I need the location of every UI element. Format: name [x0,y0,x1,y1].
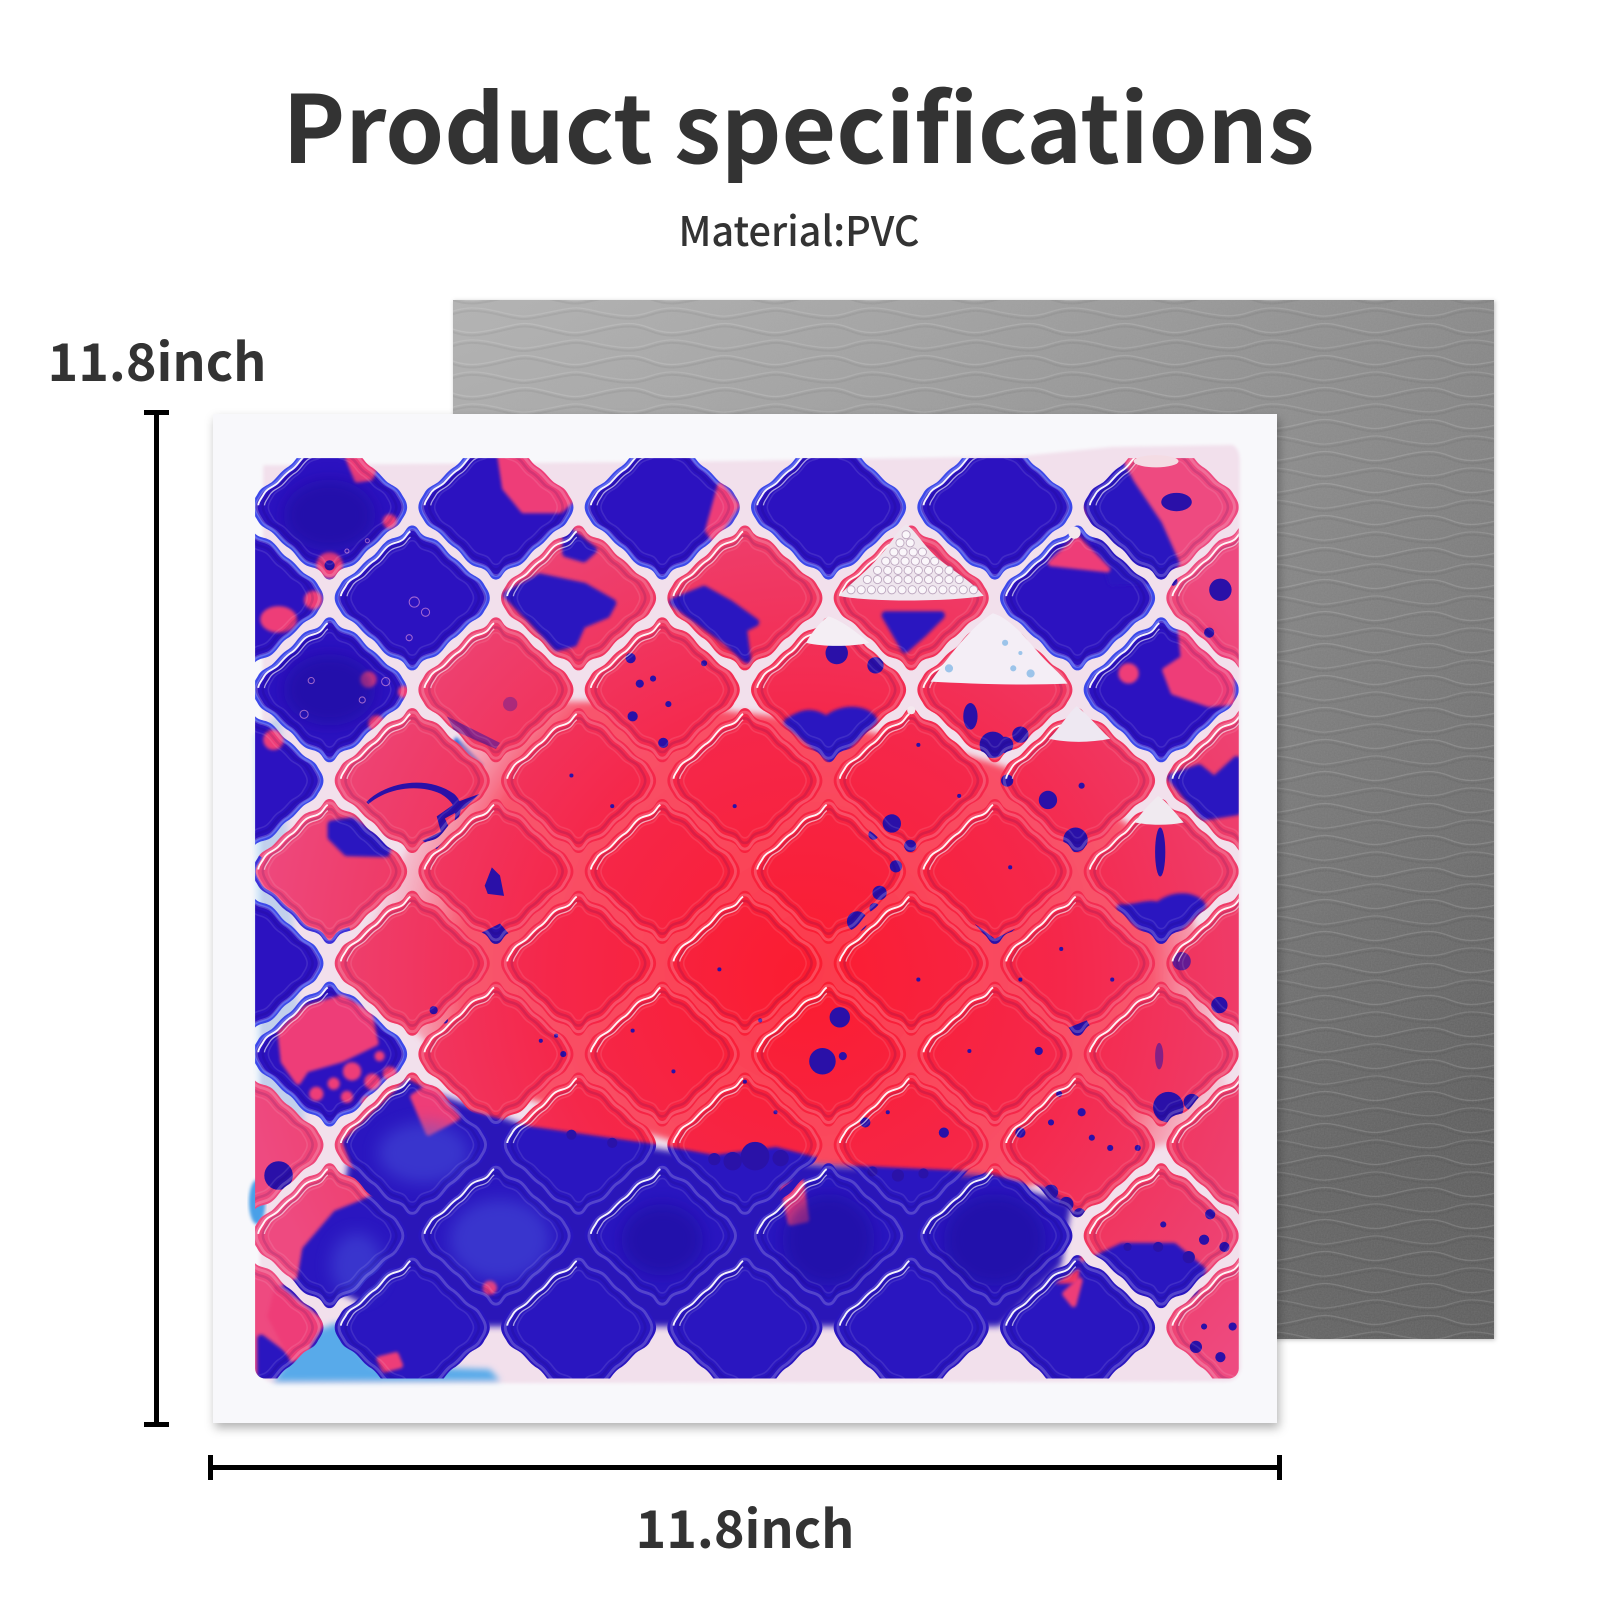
whole blue cells with lighter rim [168,435,1239,1127]
bubbles in blue gel [300,539,430,718]
grout base plate [249,445,1241,1384]
blue mottled boundary edge [566,1130,1195,1263]
lighter blue washed cells [331,1122,551,1298]
horizontal dimension ruler [208,1455,1282,1480]
panel: grey wavy back side of tile [453,300,1494,1339]
dark blue spots and streaks [264,493,1237,1362]
vertical dimension ruler [144,410,169,1427]
red gel base [245,449,1255,1388]
title: Product specifications [282,55,1314,191]
gel tile mosaic [247,444,1242,1386]
blue rim on partly pink cell [255,856,350,944]
panel: white front tile sheet [213,414,1277,1423]
width label: 11.8inch [636,1488,854,1563]
embossed cell outlines and highlights [255,458,1239,1378]
blue gel regions [261,459,1237,1382]
pink patches on blue cells [263,454,1232,1369]
dark blue deep centers [284,480,1046,1286]
white foam air pockets [806,455,1184,825]
height label: 11.8inch [48,321,266,396]
coloured gel fill clipped to diamond cells [255,458,1239,1378]
material subtitle: Material:PVC [678,198,920,258]
